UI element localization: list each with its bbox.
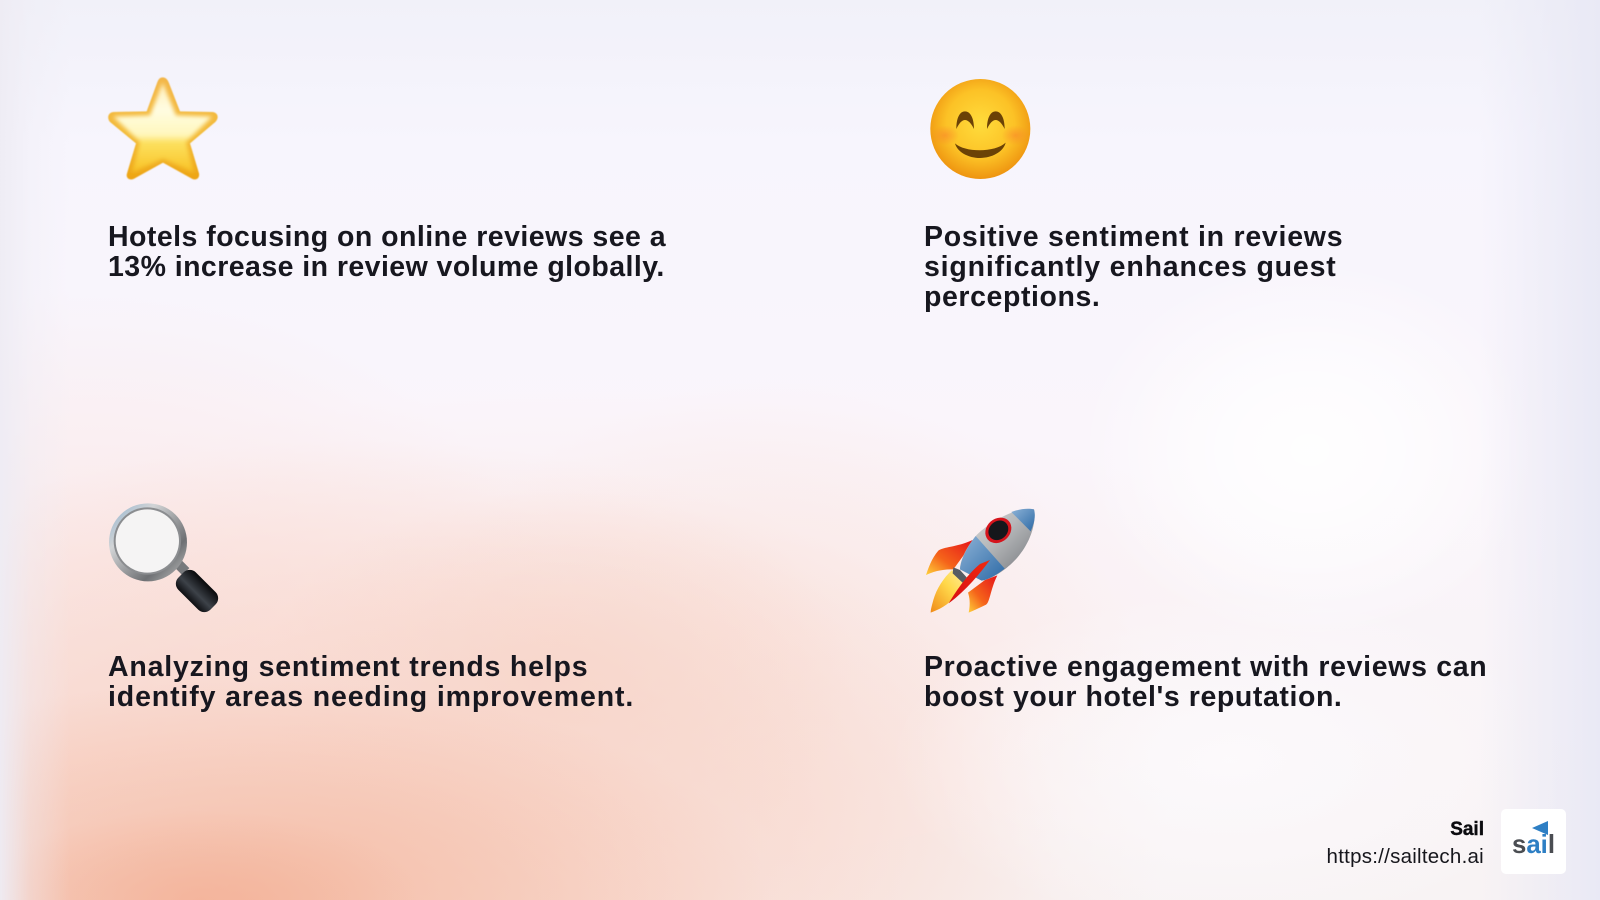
- text: hotels focusing on online reviews: Hotels focusing on online reviews see a: [108, 221, 666, 253]
- text: proactive engagement: Proactive engagement with reviews can: [924, 651, 1487, 683]
- brand url: https://sailtech.ai: [1327, 845, 1484, 868]
- logo card: [1501, 809, 1566, 874]
- icon: smiling face: [930, 79, 1030, 179]
- text: hotels focusing on online reviews: 13% increase in review volume globally.: [108, 251, 665, 283]
- icon: star: [107, 76, 218, 180]
- text: positive sentiment: [924, 221, 1343, 313]
- text: analyzing sentiment trends: [108, 651, 634, 713]
- text: analyzing sentiment trends: identify areas needing improvement.: [108, 681, 634, 713]
- text: positive sentiment: perceptions.: [924, 281, 1100, 313]
- text: hotels focusing on online reviews: [108, 221, 666, 283]
- brand name: Sail: [1450, 819, 1484, 840]
- icon: sail logo: sail: [1512, 829, 1555, 859]
- text: positive sentiment: significantly enhances guest: [924, 251, 1337, 283]
- text: analyzing sentiment trends: Analyzing sentiment trends helps: [108, 651, 588, 683]
- text: proactive engagement: boost your hotel's reputation.: [924, 681, 1342, 713]
- text: proactive engagement: [924, 651, 1487, 713]
- icon: rocket: [926, 508, 1035, 613]
- text: positive sentiment: Positive sentiment in reviews: [924, 221, 1343, 253]
- icon: magnifying glass: [109, 503, 218, 612]
